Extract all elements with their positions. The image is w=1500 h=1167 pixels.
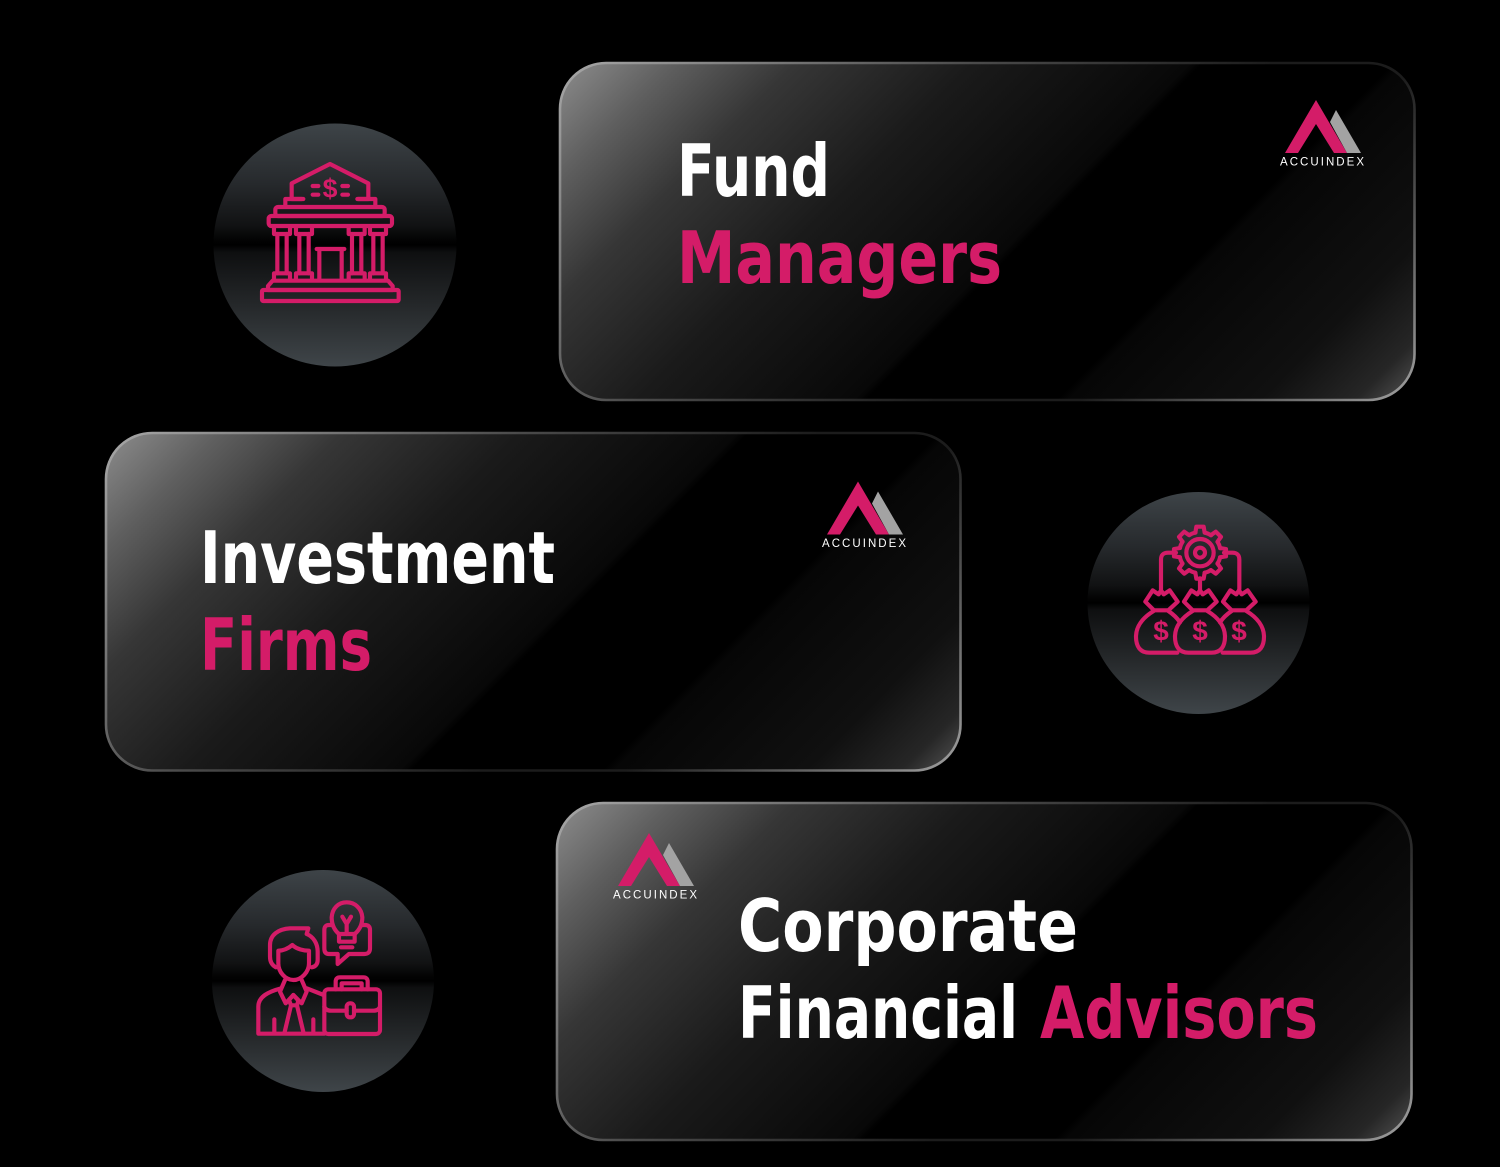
heading: Fund Managers: Fund (677, 129, 830, 213)
heading: Investment Firms (200, 516, 555, 687)
circle: money bags icon (1088, 492, 1310, 714)
circle: bank icon (214, 124, 456, 366)
heading: Investment Firms: Investment (200, 516, 555, 600)
heading: Investment Firms: Firms (200, 603, 372, 687)
panel: Corporate Financial Advisors (557, 803, 1412, 1140)
panel: Investment Firms (106, 433, 960, 770)
icon: bank building (262, 164, 399, 301)
middle bag (1184, 590, 1217, 610)
heading: Fund Managers (677, 129, 1002, 300)
heading: Corporate Financial Advisors (738, 884, 1318, 1055)
heading: Corporate Financial Advisors: Advisors (1040, 971, 1318, 1055)
heading: Corporate Financial Advisors: Financial (738, 971, 1018, 1055)
logo: Accuindex: ACCUINDEX (613, 890, 697, 902)
icon: gear and money bags: $ (1192, 615, 1208, 646)
heading: Fund Managers: Managers (677, 216, 1002, 300)
logo: Accuindex (822, 482, 906, 550)
icon: bank building: $ (323, 174, 338, 204)
icon: advisor with briefcase and idea (258, 902, 380, 1034)
panel: Fund Managers (560, 63, 1414, 400)
right bag (1223, 590, 1256, 610)
logo: Accuindex (613, 833, 697, 902)
logo: Accuindex: ACCUINDEX (822, 538, 906, 550)
logo: Accuindex (1280, 100, 1364, 168)
circle: advisor icon (212, 870, 434, 1092)
icon: gear and money bags: $ (1153, 615, 1169, 646)
icon: gear and money bags (1136, 527, 1264, 653)
icon: gear and money bags: $ (1231, 615, 1247, 646)
heading: Corporate Financial Advisors: Corporate (738, 884, 1078, 968)
left bag (1145, 590, 1178, 610)
logo: Accuindex: ACCUINDEX (1280, 156, 1364, 168)
